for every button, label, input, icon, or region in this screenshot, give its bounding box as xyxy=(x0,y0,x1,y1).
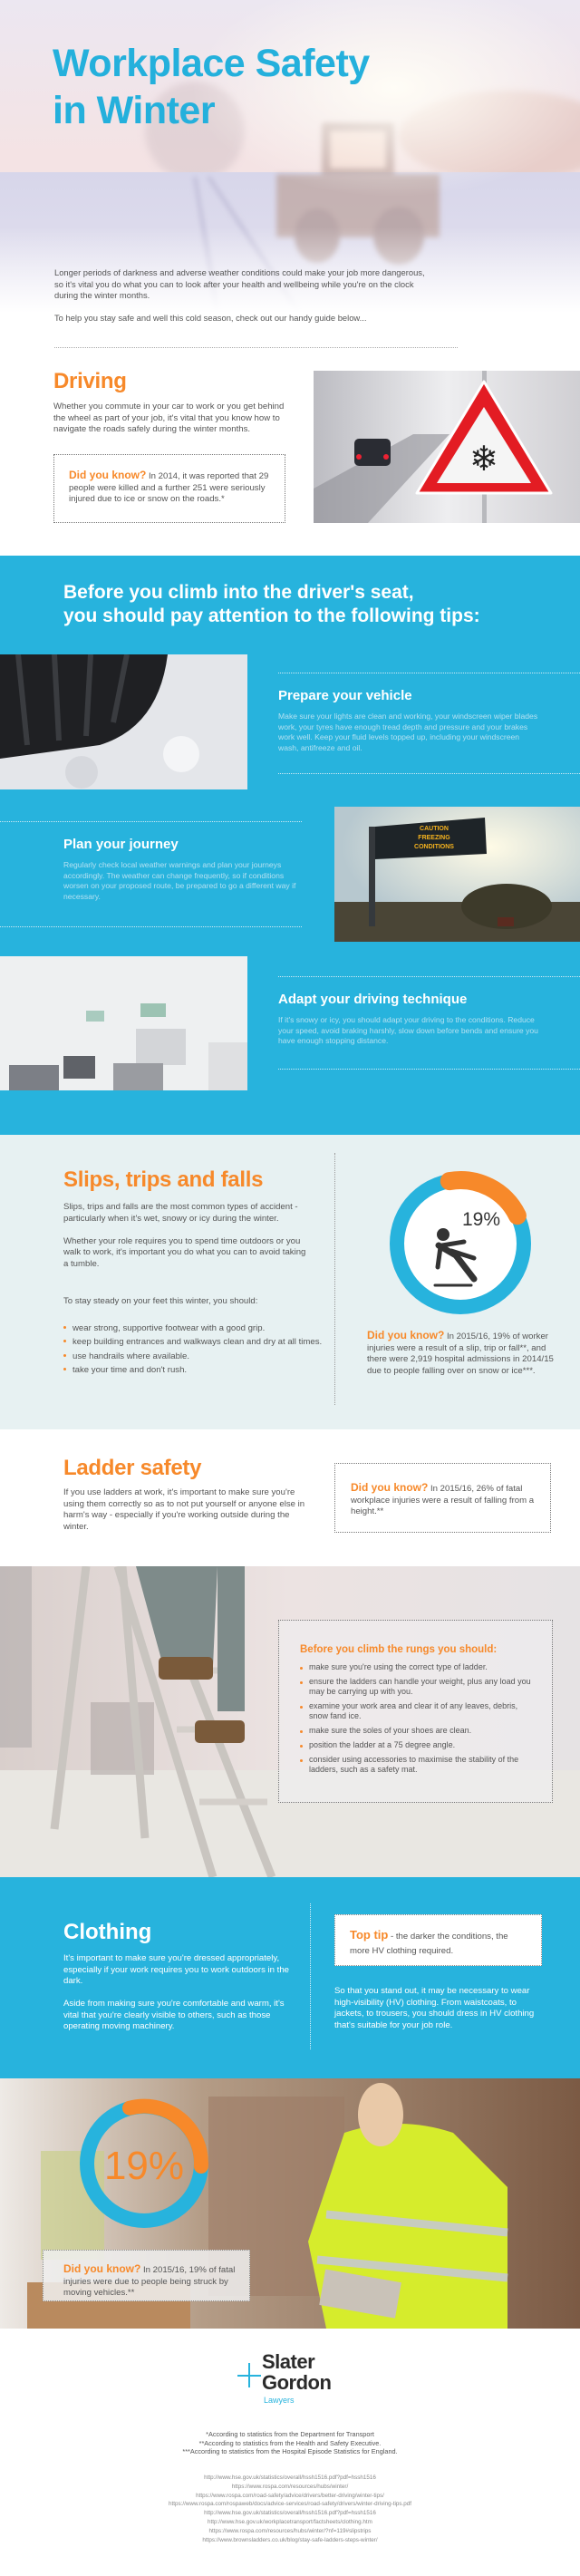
callout: before you climb the rungs: make sure you're using the correct type of ladder. xyxy=(309,1662,488,1671)
photo: worker in hi-vis xyxy=(0,2078,580,2329)
callout: did you know driving xyxy=(53,454,285,523)
tip: plan your journey: Regularly check local weather warnings and plan your journeys accordingly. The weather can change frequently, so if conditions worsen on your proposed route, be prepared to go a different way if necessary. xyxy=(63,860,295,901)
tip: plan your journey xyxy=(63,837,295,901)
clothing text: It's important to make sure you're dressed appropriately, especially if your work requires you to work outdoors in the dark. xyxy=(63,1953,289,1986)
footnotes: ***According to statistics from the Hospital Episode Statistics for England. xyxy=(182,2447,398,2455)
callout: did you know ladder: Did you know? In 2015/16, 26% of fatal workplace injuries were a result of falling from a height.** xyxy=(351,1481,534,1516)
callout: did you know driving: Did you know? In 2014, it was reported that 29 people were killed and a further 251 were seriously injured due to ice or snow on the roads.* xyxy=(69,469,268,504)
callout: before you climb the rungs: examine your work area and clear it of any leaves, debris, snow fand ice. xyxy=(309,1701,517,1720)
footnotes xyxy=(182,2430,398,2455)
source links: https://www.rospa.com/resources/hubs/winter/ xyxy=(232,2484,348,2490)
clothing text xyxy=(63,1953,289,2031)
hero photo: tractor in snow xyxy=(0,0,580,298)
tip: prepare your vehicle xyxy=(278,688,537,752)
tip: adapt your driving technique xyxy=(278,992,538,1045)
photo: caution freezing conditions sign: CAUTION xyxy=(420,826,449,832)
photo: person on ladder xyxy=(0,1566,580,1877)
source links: https://www.rospa.com/road-safety/advice/drivers/better-driving/winter-tips/ xyxy=(196,2493,384,2499)
source links: http://www.hse.gov.uk/statistics/overall/hssh1516.pdf?pdf=hssh1516 xyxy=(204,2510,376,2516)
source links: https://www.rospa.com/rospaweb/docs/advice-services/road-safety/drivers/winter-driving-tips.pdf xyxy=(169,2501,411,2507)
chart: 19% donut with slip icon xyxy=(390,1171,531,1314)
callout: did you know ladder xyxy=(334,1463,551,1533)
callout: did you know vehicles xyxy=(43,2250,250,2301)
photo: caution freezing conditions sign: CONDITIONS xyxy=(414,844,454,850)
photo: caution freezing conditions sign xyxy=(334,807,580,942)
footnotes: **According to statistics from the Health and Safety Executive. xyxy=(199,2439,381,2447)
source links: https://www.brownsladders.co.uk/blog/stay-safe-ladders-steps-winter/ xyxy=(202,2537,378,2543)
slips tips list xyxy=(63,1296,322,1375)
clothing text: Aside from making sure you're comfortable and warm, it's vital that you're clearly visible to others, such as those operating moving machinery. xyxy=(63,1999,285,2031)
ladder text: If you use ladders at work, it's important to make sure you're using them correctly so as to not put yourself or anyone else in harm's way - especially if you're working outside during the winter. xyxy=(63,1487,304,1532)
logo: Slater Gordon Lawyers: Gordon xyxy=(262,2371,331,2394)
photo: road sign snowflake: ❄ xyxy=(469,439,498,479)
driving text: Whether you commute in your car to work or you get behind the wheel as part of your job, it's vital that you know how to navigate the roads safely during the winter months. xyxy=(53,402,284,434)
title: Workplace Safety xyxy=(53,42,370,85)
logo: Slater Gordon Lawyers xyxy=(237,2350,331,2405)
heading: before you climb xyxy=(63,582,480,626)
tip: plan your journey: Plan your journey xyxy=(63,837,179,852)
clothing right text: So that you stand out, it may be necessary to wear high-visibility (HV) clothing. From waistcoats, to jackets, to trousers, you should dress in HV clothing that's suitable for your job role. xyxy=(334,1986,534,2030)
callout: before you climb the rungs: ensure the ladders can handle your weight, plus any load you may be carrying up with you. xyxy=(309,1677,531,1696)
slips text: Slips, trips and falls are the most common types of accident - particularly when it's wet, snowy or icy during the winter. xyxy=(63,1202,298,1224)
icon: slipping person xyxy=(435,1228,474,1285)
source links: https://www.rospa.com/resources/hubs/winter/?nf=119#slipstrips xyxy=(209,2528,371,2534)
title: in Winter xyxy=(53,89,215,132)
callout: did you know vehicles: Did you know? In 2015/16, 19% of fatal injuries were due to people being struck by moving vehicles.** xyxy=(63,2262,235,2298)
panel: slips trips and falls xyxy=(0,1135,580,1429)
source links xyxy=(169,2474,411,2543)
tip: adapt your driving technique: Adapt your driving technique xyxy=(278,992,467,1007)
heading: before you climb: you should pay attention to the following tips: xyxy=(63,605,480,626)
slips tips list: keep building entrances and walkways clean and dry at all times. xyxy=(72,1337,322,1347)
logo: Slater Gordon Lawyers: Lawyers xyxy=(264,2396,295,2405)
intro text: Longer periods of darkness and adverse weather conditions could make your job more dangerous, so it's vital you do what you can to look after your health and wellbeing while you're on the clock during the winter months. xyxy=(54,267,425,300)
heading: Driving: Driving xyxy=(53,369,127,393)
photo: road sign snowflake xyxy=(314,371,580,523)
tip: adapt your driving technique: If it's snowy or icy, you should adapt your driving to the conditions. Reduce your speed, avoid braking harshly, slow down before bends and ensure you have enough stopping distance. xyxy=(278,1015,538,1045)
heading: before you climb: Before you climb into the driver's seat, xyxy=(63,582,414,603)
callout: top tip xyxy=(334,1914,542,1966)
panel: clothing xyxy=(0,1877,580,2078)
photo: snowy traffic xyxy=(0,956,247,1090)
chart: 19% donut on photo: 19% xyxy=(104,2144,184,2188)
intro text xyxy=(54,267,425,323)
footnotes: *According to statistics from the Department for Transport xyxy=(206,2430,374,2438)
slips tips list: To stay steady on your feet this winter, you should: xyxy=(63,1296,257,1306)
slips tips list: take your time and don't rush. xyxy=(72,1365,187,1375)
heading: slips: Slips, trips and falls xyxy=(63,1167,263,1192)
logo: Slater Gordon Lawyers: Slater xyxy=(262,2350,314,2373)
callout: before you climb the rungs: make sure the soles of your shoes are clean. xyxy=(309,1726,471,1735)
tip: prepare your vehicle: Prepare your vehicle xyxy=(278,688,412,703)
chart: 19% donut with slip icon: 19% xyxy=(462,1209,500,1230)
panel: driver tips (blue band) xyxy=(0,556,580,1135)
photo: tyre in snow xyxy=(0,654,247,789)
callout: before you climb the rungs xyxy=(278,1620,553,1803)
slips text: Whether your role requires you to spend time outdoors or you walk to work, it's important you do what you can to avoid taking a tumble. xyxy=(63,1236,305,1269)
intro text: To help you stay safe and well this cold season, check out our handy guide below... xyxy=(54,313,366,323)
slips text xyxy=(63,1202,305,1269)
slips tips list: use handrails where available. xyxy=(72,1351,189,1361)
heading: ladder safety: Ladder safety xyxy=(63,1456,201,1480)
photo: caution freezing conditions sign: FREEZING xyxy=(418,835,450,841)
callout: before you climb the rungs: consider using accessories to maximise the stability of the ladders, such as a safety mat. xyxy=(309,1755,518,1774)
callout: did you know slips: Did you know? In 2015/16, 19% of worker injuries were a result of a slip, trip or fall**, and there were 2,919 hospital admissions in 2014/15 due to people falling over on snow or ice***. xyxy=(367,1329,554,1376)
tip: prepare your vehicle: Make sure your lights are clean and working, your windscreen wiper blades work, your tyres have enough tread depth and pressure and your brakes work well. Keep your fluid levels topped up, including your windscreen wash, antifreeze and oil. xyxy=(278,712,537,752)
heading: clothing: Clothing xyxy=(63,1920,151,1944)
chart: 19% donut on photo xyxy=(80,2099,208,2228)
callout: top tip: Top tip - the darker the conditions, the more HV clothing required. xyxy=(350,1928,508,1956)
title xyxy=(53,42,370,132)
source links: http://www.hse.gov.uk/statistics/overall/hssh1516.pdf?pdf=hssh1516 xyxy=(204,2474,376,2481)
slips tips list: wear strong, supportive footwear with a good grip. xyxy=(72,1323,265,1332)
source links: http://www.hse.gov.uk/workplacetransport/factsheets/clothing.htm xyxy=(208,2519,372,2525)
callout: before you climb the rungs: Before you climb the rungs you should: xyxy=(300,1644,497,1655)
callout: before you climb the rungs: position the ladder at a 75 degree angle. xyxy=(309,1740,455,1749)
